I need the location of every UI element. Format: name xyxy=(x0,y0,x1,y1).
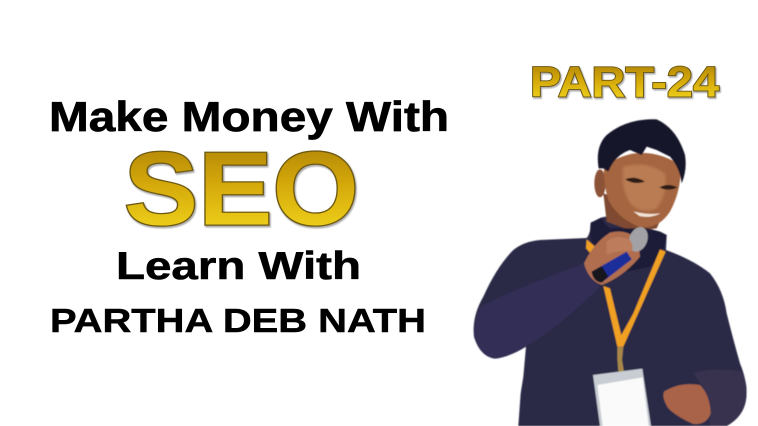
mouth xyxy=(633,211,661,217)
ear xyxy=(594,169,606,197)
hand on lower right xyxy=(663,384,711,424)
badge: part number: PART-24 xyxy=(530,58,719,106)
heading: SEO gold lettering: SEO xyxy=(124,132,359,248)
lanyard clip xyxy=(617,347,624,372)
microphone head xyxy=(626,224,651,254)
face highlight xyxy=(623,164,666,211)
badge: part number: PART-24 xyxy=(530,58,719,106)
microphone handle xyxy=(592,252,632,283)
neck xyxy=(603,193,663,232)
collar xyxy=(590,217,667,272)
sleeve shading xyxy=(474,263,600,359)
microphone tail xyxy=(592,266,608,283)
photo: presenter holding microphone xyxy=(474,119,747,426)
right sleeve shading xyxy=(693,370,747,426)
hair xyxy=(598,119,686,183)
heading: SEO gold lettering: SEO xyxy=(124,132,359,248)
heading: make money with: Make Money With xyxy=(49,93,449,140)
lanyard xyxy=(586,239,666,347)
heading: SEO gold lettering: SEO xyxy=(125,133,360,249)
heading: learn with: Learn With xyxy=(116,245,361,288)
id badge xyxy=(593,369,651,426)
face xyxy=(604,153,681,227)
sweater body xyxy=(474,217,747,426)
eyes xyxy=(625,178,677,190)
badge: part number: PART-24 xyxy=(531,60,720,108)
forearm cuff and hand holding mic xyxy=(584,231,640,285)
fingers over mic xyxy=(607,237,632,255)
heading: presenter name: PARTHA DEB NATH xyxy=(50,302,426,339)
